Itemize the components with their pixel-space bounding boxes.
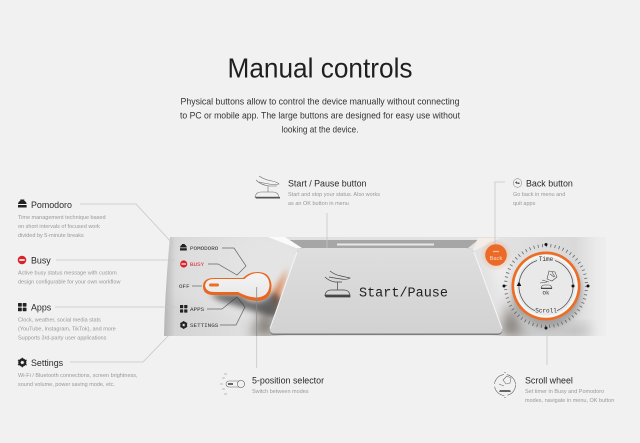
selector labels: BUSY [190, 261, 205, 268]
panel: start pause description: Start / Pause button [288, 178, 367, 188]
scroll wheel: Scroll [535, 308, 557, 314]
scroll wheel: Ok [543, 290, 550, 296]
panel: busy description [18, 256, 120, 286]
panel: back description: Back button [526, 178, 573, 188]
panel: apps description [18, 302, 116, 342]
panel: back description [513, 178, 573, 207]
panel: pomodoro description: on short intervals of focused work [18, 224, 100, 230]
panel: scroll wheel description: Scroll wheel [525, 376, 573, 386]
icon: selector [220, 374, 245, 394]
icon: pressing hand [255, 176, 280, 198]
panel: apps description: Apps [31, 302, 52, 312]
icon: mini pomodoro [180, 244, 187, 250]
selector labels: SETTINGS [190, 322, 219, 329]
intro text [180, 96, 460, 136]
intro text: looking at the device. [282, 124, 358, 136]
panel: busy description: Busy [31, 256, 51, 266]
panel: settings description: Settings [31, 358, 64, 368]
icon: scroll wheel [494, 372, 516, 398]
icon: apps [18, 303, 26, 311]
panel: settings description: Wi-Fi / Bluetooth connections, screen brightness, [18, 373, 138, 379]
scroll wheel: Time [539, 256, 554, 263]
panel: start pause description [255, 176, 380, 207]
intro text: Physical buttons allow to control the device manually without connecting [180, 96, 460, 108]
start pause button [270, 248, 502, 335]
panel: start pause description: as an OK button in menu [288, 201, 349, 207]
scroll wheel [502, 243, 590, 330]
panel: selector description: Switch between modes [252, 389, 309, 395]
panel: busy description: Active busy status message with custom [18, 270, 117, 276]
panel: scroll wheel description [494, 372, 614, 404]
panel: selector description [220, 374, 324, 395]
selector leader [256, 336, 258, 368]
panel: scroll wheel description: modes, navigate in menu, OK button [525, 398, 614, 404]
icon: pressing hand [325, 271, 350, 297]
icon: hand on button [540, 271, 557, 288]
icon: mini apps [180, 305, 187, 313]
device body [164, 237, 606, 336]
dial ticks [506, 246, 586, 326]
icon: mini busy [180, 260, 187, 268]
panel: busy description: design configurable for your own workflow [18, 280, 120, 286]
panel: scroll wheel description: Set timer in Busy and Pomodoro [525, 389, 604, 395]
selector labels: OFF [179, 283, 190, 290]
panel: pomodoro description: divided by 5-minute breaks [18, 233, 84, 239]
selector labels: POMODORO [190, 245, 219, 252]
icon: mini settings [180, 321, 187, 329]
selector labels: APPS [190, 306, 205, 313]
start pause button: Start/Pause [359, 286, 448, 302]
icon: pomodoro [18, 200, 27, 208]
panel: pomodoro description [18, 200, 106, 239]
icon: settings [18, 358, 27, 367]
panel: pomodoro description: Pomodoro [31, 200, 72, 210]
five position selector knob [203, 272, 282, 336]
panel: settings description [18, 358, 138, 388]
panel: back description: Go back in menu and [513, 192, 565, 198]
panel: apps description: Supports 3rd-party user applications [18, 336, 107, 342]
selector labels [179, 244, 246, 329]
panel: pomodoro description: Time management technique based [18, 215, 106, 221]
panel: selector description: 5-position selector [252, 376, 324, 386]
panel: start pause description: Start and stop your status. Also works [288, 192, 380, 198]
leader lines [55, 182, 547, 365]
title: Manual controls [228, 52, 412, 84]
icon: back [513, 179, 522, 187]
back button [480, 239, 512, 271]
back button: Back [490, 256, 503, 262]
icon: busy [18, 256, 26, 264]
panel: apps description: (YouTube, Instagram, TikTok), and more [18, 326, 116, 332]
panel: settings description: sound volume, power saving mode, etc. [18, 382, 115, 388]
intro text: to PC or mobile app. The large buttons are designed for easy use without [180, 110, 460, 122]
panel: back description: quit apps [513, 201, 536, 207]
panel: apps description: Clock, weather, social media stats [18, 318, 101, 324]
